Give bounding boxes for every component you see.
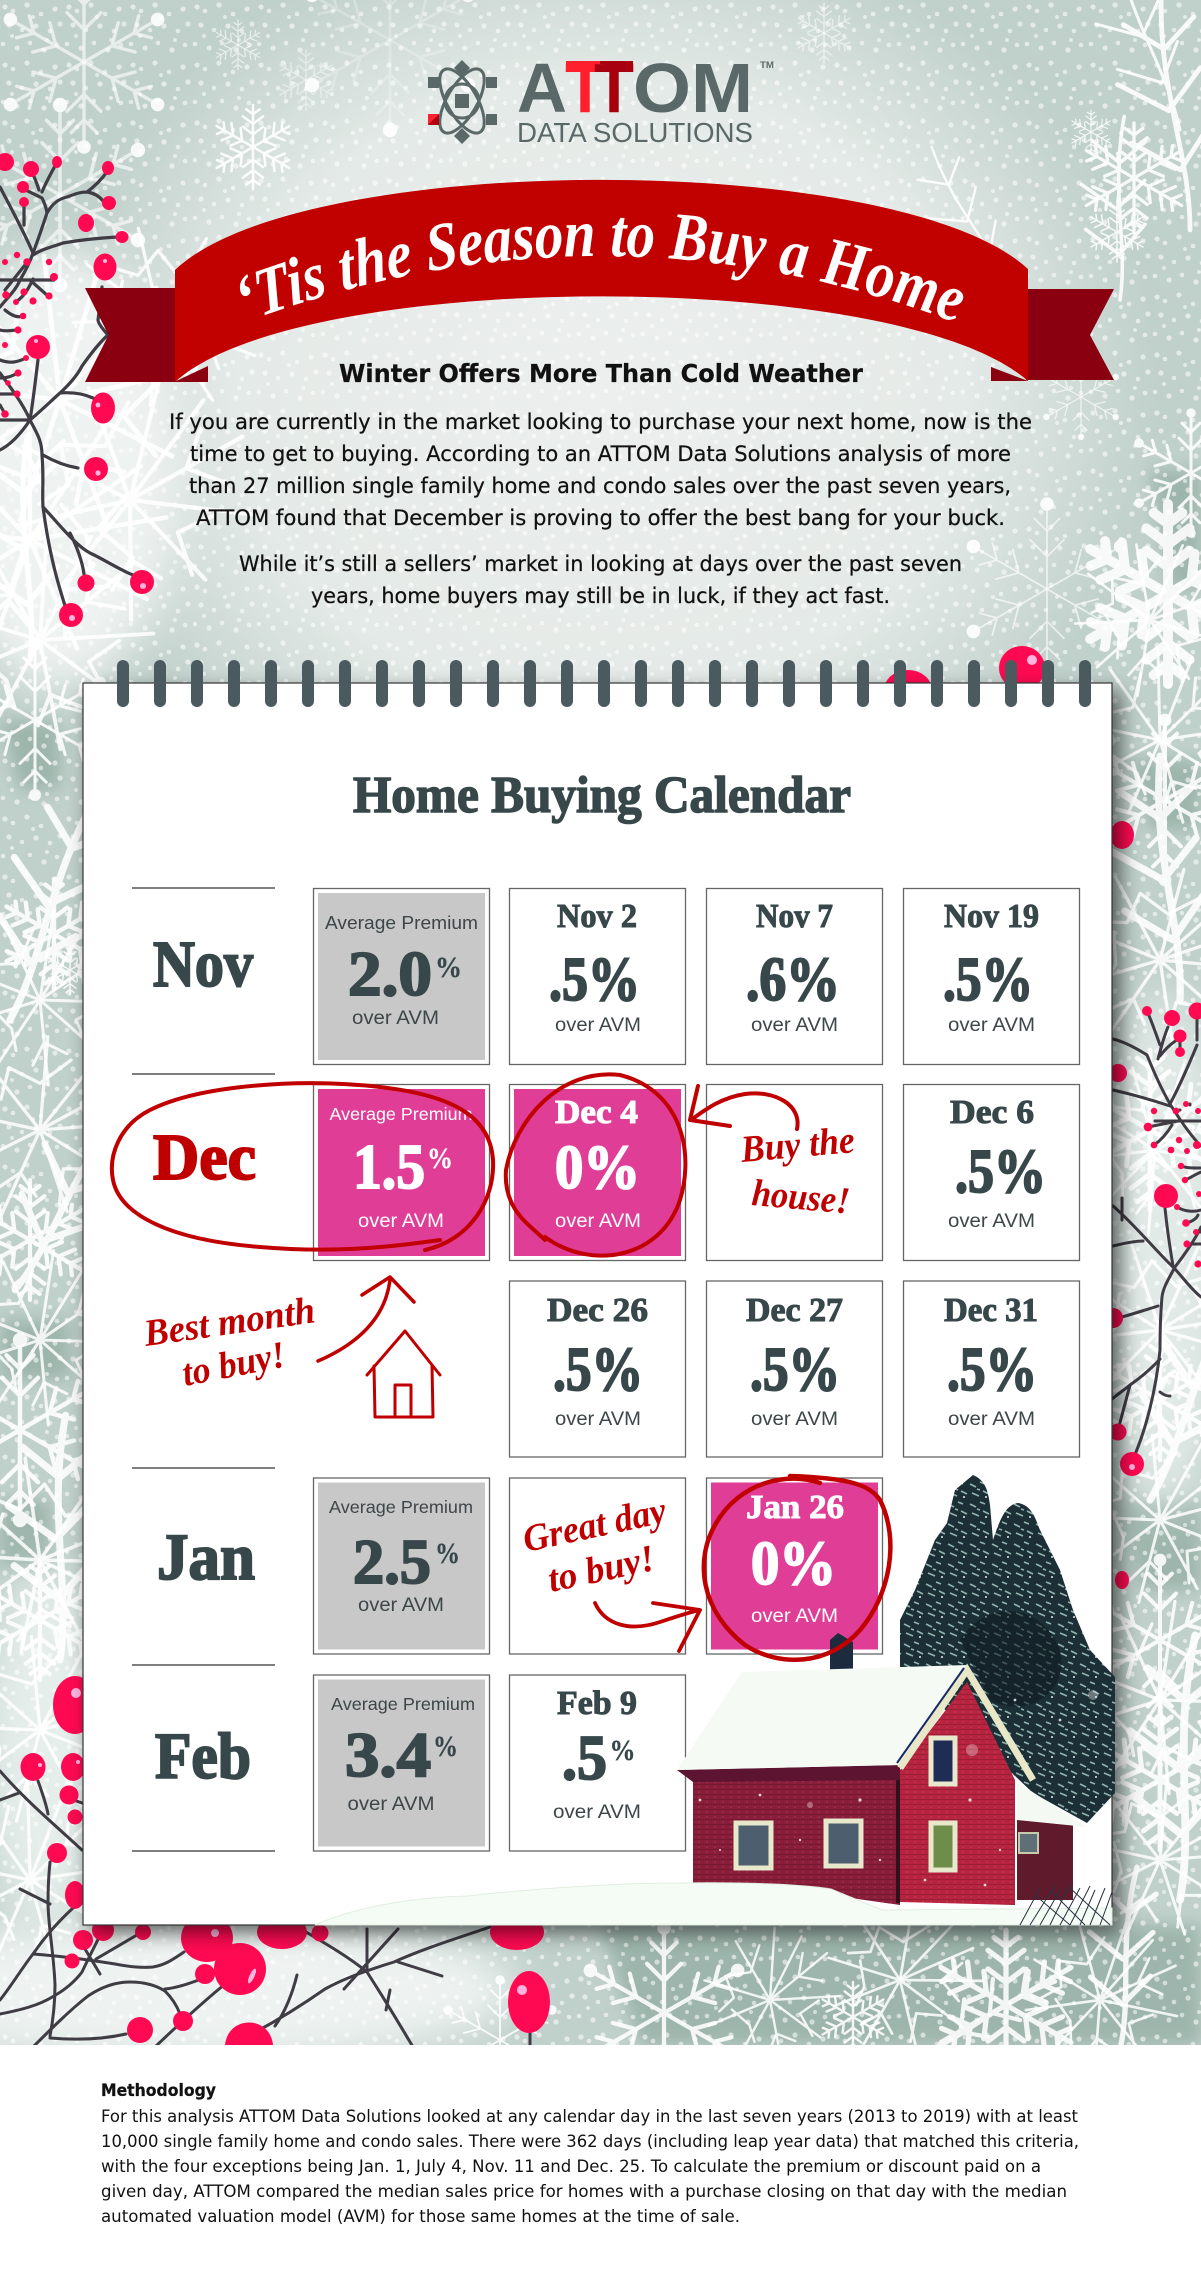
cell: Feb 9 [510,1675,686,1851]
annotation: Great day to buy [519,1490,700,1651]
cell: Dec 31: over AVM [948,1409,1035,1430]
cell: Dec 6: .5% [955,1138,1046,1206]
cell: Dec 26: over AVM [555,1409,641,1430]
cell: November average premium: % [435,951,462,984]
cell: November average premium: Average Premium [325,913,478,933]
cell: Dec 6: Dec 6 [950,1094,1034,1131]
cell: Jan 26: 0% [751,1530,836,1598]
cell: Dec 27: .5% [750,1336,840,1404]
cell: Nov 19: .5% [943,946,1033,1014]
ribbon banner with title [85,180,1114,382]
cell: Dec 4: Dec 4 [555,1094,638,1131]
gable trim [900,1670,1033,1780]
cell: Feb 9: % [610,1734,636,1767]
cell: January average premium [314,1478,490,1654]
cell: Dec 31: .5% [947,1336,1037,1404]
cell: Feb 9: over AVM [553,1802,641,1823]
cell: Nov 19: Nov 19 [944,898,1039,935]
intro paragraph: years, home buyers may still be in luck, if they act fast. [311,584,890,609]
logo: ATTOM Data Solutions: A [517,49,567,127]
eave [677,1765,900,1782]
cell: Dec 4: over AVM [555,1211,641,1232]
snowy roof [677,1665,967,1770]
intro paragraph: If you are currently in the market looking to purchase your next home, now is the [169,410,1032,435]
cell: Nov 2: over AVM [555,1015,641,1036]
cell: Nov 7: .6% [746,946,840,1014]
main wall [693,1770,900,1905]
windows [736,1738,955,1870]
methodology: given day, ATTOM compared the median sales price for homes with a purchase closing on that day with the median [101,2182,1067,2201]
month column: Jan [157,1521,255,1594]
methodology [101,2081,1079,2226]
cell: Dec 26 [510,1281,686,1457]
calendar page [83,660,1120,1932]
subheading: Winter Offers More Than Cold Weather [339,359,864,388]
logo: ATTOM Data Solutions: T [594,49,634,127]
cell: December average premium: Average Premium [330,1104,472,1124]
cell: January average premium: over AVM [358,1595,444,1616]
cell: Nov 7: Nov 7 [756,898,833,935]
cell: Dec 31 [904,1281,1080,1457]
cell: November average premium: over AVM [352,1008,439,1029]
cell: Jan 26: over AVM [751,1606,838,1627]
annotation: Great day to buy: Great day [519,1490,670,1561]
cell: Dec 4 [510,1084,686,1260]
logo icon [428,60,497,144]
annotation: Buy the house: Buy the [738,1119,856,1171]
house and trees scene [315,1475,1115,1925]
cell: Nov 19 [904,888,1080,1064]
cell: Dec 31: Dec 31 [944,1292,1038,1329]
cell: December average premium [314,1084,490,1260]
cell: Dec 6 [904,1084,1080,1260]
berry branches: upper left [0,153,154,627]
bushes [1020,1884,1112,1925]
annotation: Buy the house: house! [750,1172,852,1223]
logo: ATTOM Data Solutions: DATA SOLUTIONS [517,117,753,148]
methodology: Methodology [101,2081,216,2100]
icon: hand drawn house [367,1331,440,1417]
cell: November average premium [314,888,490,1064]
cell: December average premium: 1.5 [353,1131,425,1202]
cell: Dec 4: 0% [555,1134,640,1202]
logo: ATTOM Data Solutions: TM [760,60,774,70]
intro paragraph: While it’s still a sellers’ market in looking at days over the past seven [239,552,962,577]
cell: Dec 6: over AVM [948,1211,1035,1232]
calendar rings [117,660,1091,707]
cell: January average premium: 2.5 [353,1526,431,1597]
methodology: automated valuation model (AVM) for those same homes at the time of sale. [101,2207,740,2226]
logo: ATTOM Data Solutions [428,49,774,148]
methodology: For this analysis ATTOM Data Solutions looked at any calendar day in the last seven years (2013 to 2019) with at least [101,2107,1079,2126]
cell: February average premium: % [433,1730,458,1763]
cell: February average premium [314,1675,490,1851]
logo: ATTOM Data Solutions: OM [633,49,753,127]
cell: Nov 19: over AVM [948,1015,1035,1036]
methodology: 10,000 single family home and condo sales. There were 362 days (including leap year data) that matched this criteria, [101,2132,1079,2151]
cell: Dec 27 [706,1281,882,1457]
intro paragraph [169,410,1032,609]
annotation: Dec month circle [112,1083,493,1250]
cell: February average premium: Average Premium [331,1694,475,1714]
annex [1017,1818,1073,1900]
chimney [830,1633,853,1676]
calendar heading: Home Buying Calendar [353,767,851,824]
intro paragraph: ATTOM found that December is proving to offer the best bang for your buck. [196,506,1005,531]
cell: February average premium: over AVM [348,1794,434,1815]
berry branches: bottom left [0,1676,550,2047]
cell: Great day note box [510,1478,686,1654]
cell: December average premium: % [427,1142,453,1175]
falling snow [699,1690,1098,1886]
cell: Jan 26: Jan 26 [746,1489,844,1526]
month column [132,888,275,1851]
month column: Feb [155,1720,251,1793]
month column: Dec [153,1121,256,1194]
methodology: with the four exceptions being Jan. 1, July 4, Nov. 11 and Dec. 25. To calculate the premium or discount paid on a [101,2157,1041,2176]
snow ground [315,1883,1112,1925]
cell: Nov 2: Nov 2 [557,898,637,935]
cell: Nov 7: over AVM [751,1015,838,1036]
cell: Dec 26: Dec 26 [547,1292,648,1329]
cell: February average premium: 3.4 [345,1719,431,1790]
cell: January average premium: % [435,1537,460,1570]
cell: Nov 2: .5% [549,946,640,1014]
intro paragraph: than 27 million single family home and condo sales over the past seven years, [189,474,1011,499]
cell: Buy the house note box [706,1084,882,1260]
annotation: Great day to buy: to buy! [544,1537,659,1601]
cell: Jan 26 [706,1478,882,1654]
cell: Nov 7 [706,888,882,1064]
cell: January average premium: Average Premium [329,1497,473,1517]
berry branches: right side [884,646,1201,1589]
snowy trees [900,1475,1115,1823]
logo: ATTOM Data Solutions: T [565,49,605,127]
annotation: Dec 4 circle [506,1074,685,1256]
cell: Nov 2 [510,888,686,1064]
annotation: Best month to buy [140,1277,414,1395]
cell: Dec 27: Dec 27 [746,1292,843,1329]
cell: Dec 27: over AVM [751,1409,838,1430]
gable wall [900,1682,1015,1905]
month column: Nov [153,928,253,1001]
title: ‘Tis the Season to Buy a Home [240,214,964,320]
annotation: Best month to buy: to buy! [179,1334,289,1395]
cell: Feb 9: Feb 9 [557,1685,637,1722]
annotation: Jan 26 circle [704,1476,890,1660]
annotation: Buy the house [690,1086,856,1223]
cell: November average premium: 2.0 [348,938,432,1009]
annotation: Best month to buy: Best month [140,1289,318,1355]
intro paragraph: time to get to buying. According to an ATTOM Data Solutions analysis of more [190,442,1011,467]
cell: December average premium: over AVM [358,1211,444,1232]
cell: Dec 26: .5% [553,1336,643,1404]
cell: Feb 9: .5 [562,1722,607,1793]
